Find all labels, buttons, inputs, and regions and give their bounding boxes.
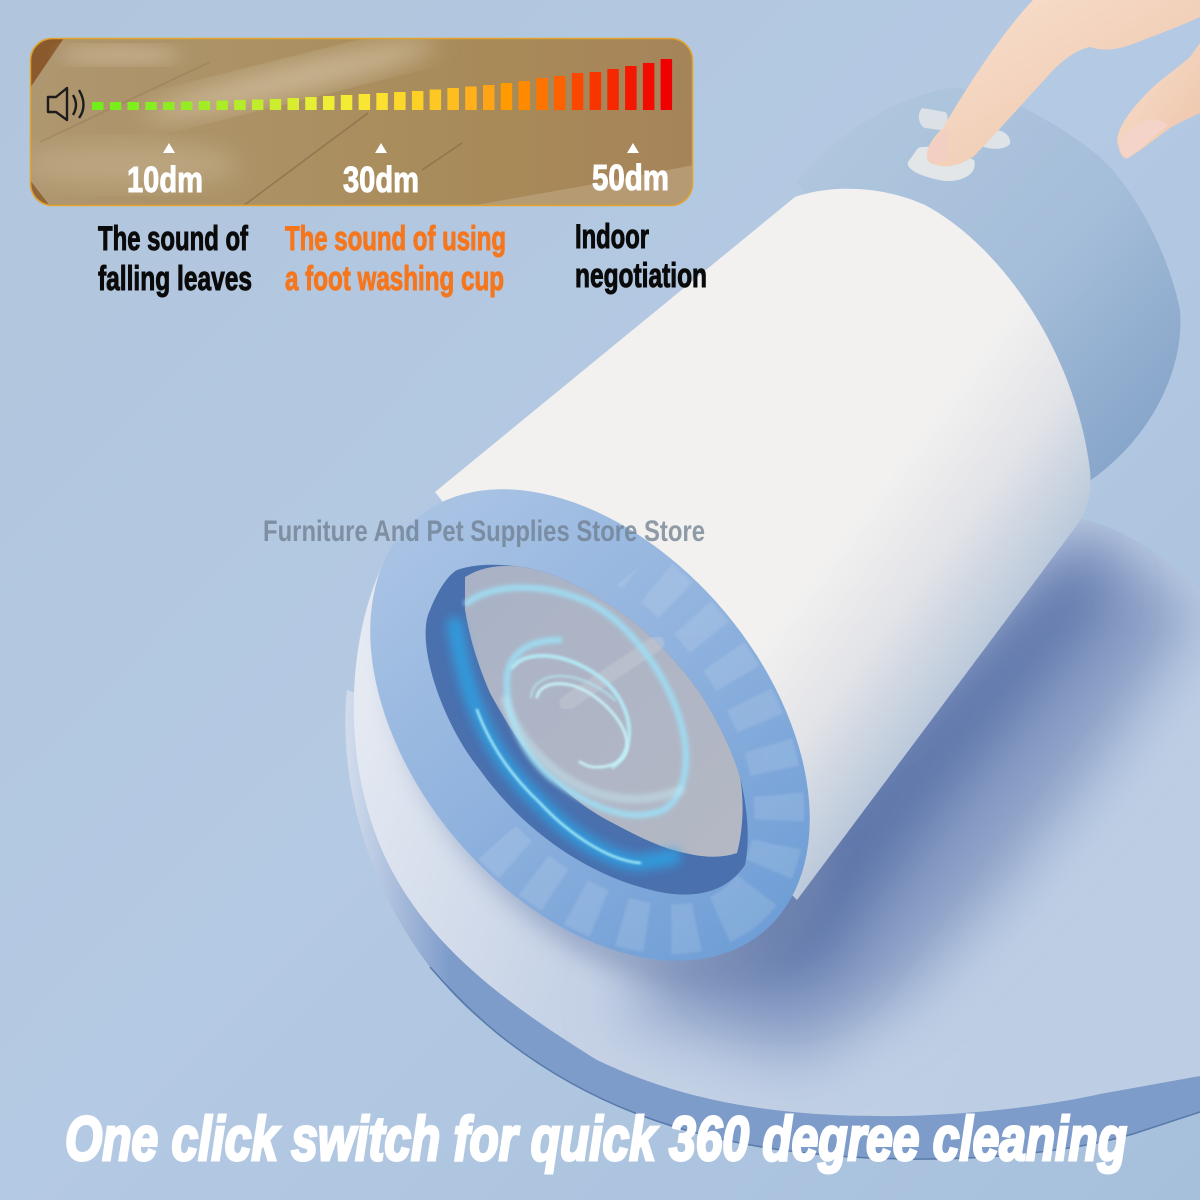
silicone rim: [370, 489, 810, 961]
marker 30dm: [343, 143, 419, 200]
panel: noise level: [20, 28, 693, 206]
power buttons: [908, 108, 1010, 181]
lower pale band: [505, 700, 680, 799]
large spiral: [467, 588, 686, 815]
second finger: [1117, 43, 1200, 158]
reflection bar: [567, 643, 657, 703]
plate base: [345, 521, 1200, 1160]
marker 50dm: [592, 143, 669, 198]
second fingernail: [1120, 119, 1168, 158]
cyan glow arc: [455, 625, 673, 863]
white body: [435, 189, 1090, 900]
marker 10dm: 10dm: [127, 159, 203, 200]
marker 30dm: 30dm: [343, 159, 419, 200]
marker 10dm: [127, 143, 203, 200]
marker 50dm: 50dm: [592, 157, 669, 198]
label: indoor negotiation: negotiation: [575, 257, 707, 295]
volume bars: [92, 59, 672, 110]
inner lens: [465, 566, 743, 857]
pointing finger: [927, 0, 1200, 166]
label: foot washing cup: [285, 220, 506, 298]
label: falling leaves: The sound of: [98, 220, 248, 258]
product: foot washing cup: [370, 106, 1180, 961]
wood panel background: [20, 28, 693, 206]
label: falling leaves: [98, 220, 252, 298]
mid ring: [513, 656, 629, 767]
label: foot washing cup: a foot washing cup: [285, 260, 504, 298]
speaker icon: [48, 88, 84, 120]
label: indoor negotiation: [575, 218, 707, 295]
fingernail: [928, 128, 948, 162]
hand: [927, 0, 1200, 166]
blue cap: [797, 88, 1180, 482]
store watermark: Furniture And Pet Supplies Store Store: [263, 515, 705, 548]
label: falling leaves: falling leaves: [98, 260, 252, 298]
label: foot washing cup: The sound of using: [285, 220, 506, 258]
water swirls: [455, 588, 686, 863]
cast shadow on plate: [390, 518, 1200, 1082]
inner rings: [537, 684, 627, 767]
dark inner opening: [426, 565, 748, 895]
label: indoor negotiation: Indoor: [575, 218, 649, 256]
